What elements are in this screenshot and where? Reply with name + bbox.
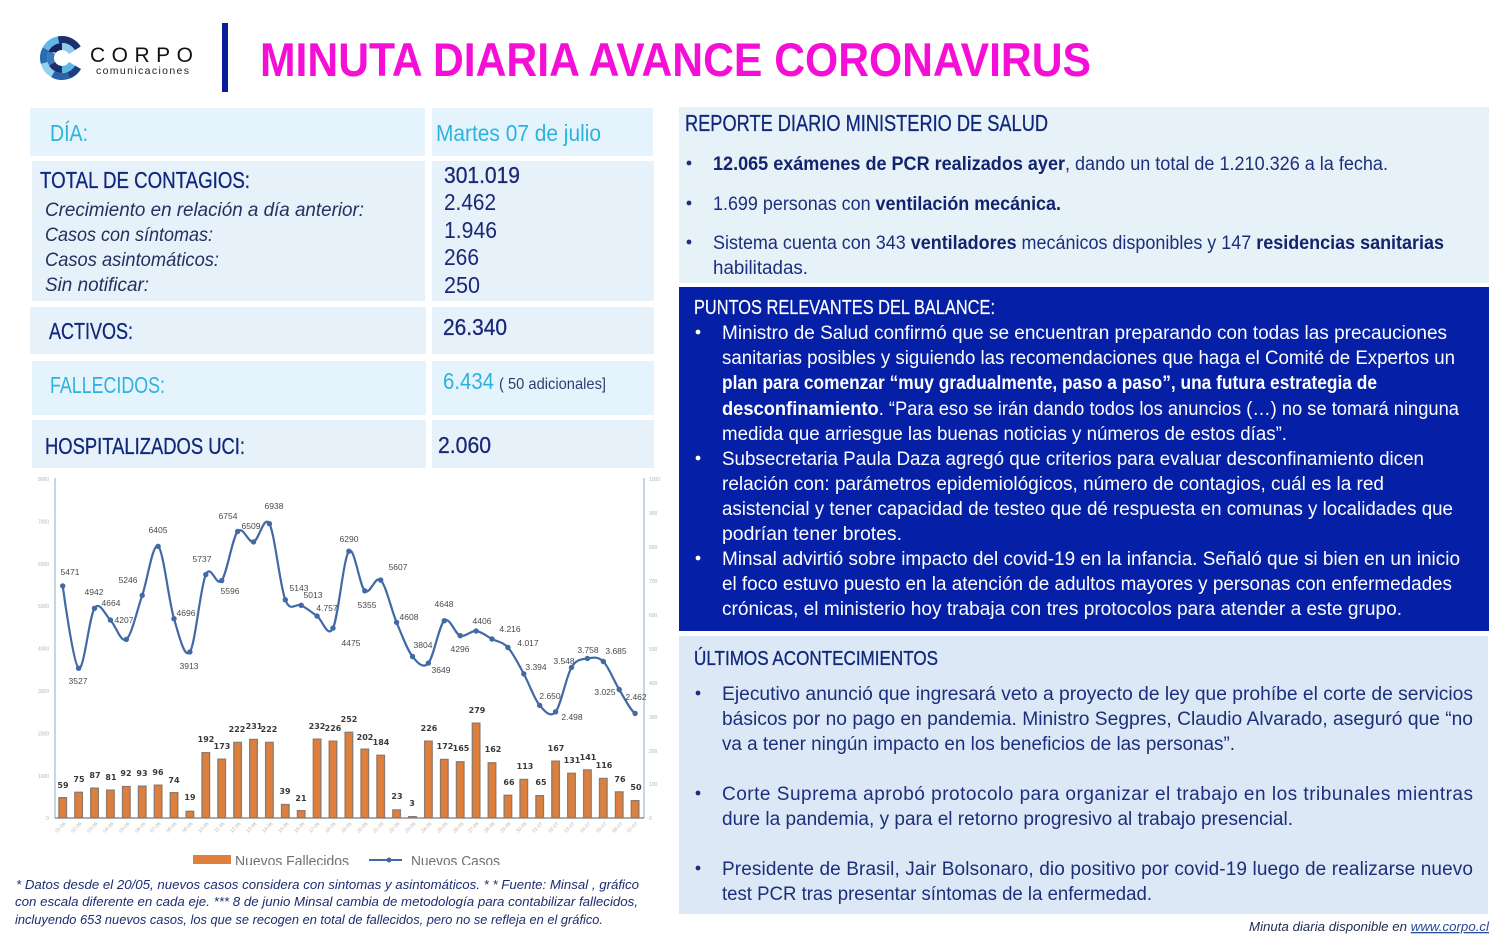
panel: dia: Martes 07 de julio [436,120,601,146]
line value labels: 4696 [177,608,196,618]
line value labels: 4648 [435,599,454,609]
bullets: balance: desconfinamiento. “Para eso se irán dando todos los anuncios (…) no se tomará ninguna [722,399,1459,420]
line value labels: 5607 [389,562,408,572]
line value labels: 5143 [290,583,309,593]
bullets: reporte [687,154,1444,279]
panel: reporte diario ministerio de salud [679,107,1489,283]
date labels: 10-06 [197,821,211,834]
bar value labels: 3 [409,799,415,808]
bar value labels: 65 [535,778,547,787]
line value labels: 5355 [358,600,377,610]
date labels: 20-06 [356,821,370,834]
bar value labels: 252 [341,715,357,724]
chart footnote [15,877,639,927]
panel: total de contagios: Casos con síntomas: [45,225,213,246]
panel: hospitalizados uci [32,420,654,468]
date labels: 15-06 [277,821,291,834]
date labels: 04-07 [579,821,593,834]
bar value labels: 162 [485,745,501,754]
bar value labels: 231 [246,722,263,731]
legend: Nuevos Fallecidos [235,853,349,870]
panel: fallecidos: ( 50 adicionales] [499,376,606,393]
bar value labels: 165 [453,744,470,753]
chart axes: 3000 [38,689,49,695]
bar value labels: 131 [564,756,581,765]
date labels: 27-06 [467,821,481,834]
chart axes: 700 [649,579,658,585]
line value labels: 3.758 [577,645,599,655]
panel: total de contagios: 1.946 [444,217,497,243]
line value labels: 4475 [342,638,361,648]
date labels: 23-06 [404,821,418,834]
date labels: 04-06 [102,821,116,834]
bars: nuevos fallecidos [59,723,639,818]
panel: hospitalizados uci: HOSPITALIZADOS UCI: [45,433,245,459]
bar value labels: 50 [630,783,642,792]
line value labels: 6938 [265,501,284,511]
panel: fallecidos: 6.434 [443,368,494,394]
chart axes [38,477,660,822]
chart axes: 400 [649,681,658,687]
icon: corpo logo [37,33,193,83]
bullets: acontecimientos: va a tener ningún impacto en los beneficios de las personas”. [722,734,1235,755]
bar value labels: 96 [152,768,164,777]
date labels: 07-06 [149,821,163,834]
chart axes: 7000 [38,520,49,526]
chart axes: 5000 [38,604,49,610]
line: nuevos casos [60,521,638,716]
chart axes: 0 [46,816,49,822]
bullets: balance: medida que arriesgue las buenas noticias y números de estos días”. [722,424,1287,445]
panel: total de contagios: Casos asintomáticos: [45,250,219,271]
chart footnote: * Datos desde el 20/05, nuevos casos considera con sintomas y asintomáticos. * * Fuente: Minsal , gráfico [16,877,639,892]
header [37,23,1091,92]
line value labels: 4207 [115,615,134,625]
bar value labels: 222 [229,725,245,734]
line value labels: 6754 [219,511,238,521]
bullets: balance: sanitarias posibles y siguiendo las recomendaciones que haga el Comité de Expertos un [722,348,1455,369]
chart axes: 300 [649,715,658,721]
date labels: 01-07 [531,821,545,834]
panel: fallecidos: FALLECIDOS: [50,372,165,398]
panel: total de contagios: Sin notificar: [45,275,149,296]
panel: total de contagios: 266 [444,244,479,270]
date labels: 03-06 [86,821,100,834]
line value labels: 2.498 [561,712,583,722]
line value labels: 3.025 [594,687,616,697]
date labels: 07-07 [626,821,640,834]
panel: activos: 26.340 [443,314,507,340]
bar value labels: 75 [73,775,85,784]
line value labels: 2.462 [625,692,647,702]
panel: activos [30,307,654,354]
panel: total de contagios: 301.019 [444,162,520,188]
date labels: 12-06 [229,821,243,834]
date labels: 11-06 [213,821,227,834]
panel: activos: ACTIVOS: [49,318,133,344]
chart: nuevos fallecidos y nuevos casos [38,477,660,873]
line value labels: 4296 [451,644,470,654]
bullets: balance: plan para comenzar “muy gradualmente, paso a paso”, una futura estrategia de [722,373,1377,394]
date labels: 25-06 [436,821,450,834]
date labels: 09-06 [181,821,195,834]
line value labels: 4.216 [499,624,521,634]
bar value labels: 21 [295,794,307,803]
bullets: acontecimientos: Corte Suprema aprobó protocolo para organizar el trabajo en los tribunales mientras [722,784,1473,805]
chart axes: 500 [649,647,658,653]
panel: dia: DÍA: [50,120,88,146]
date labels: 22-06 [388,821,402,834]
bar value labels: 279 [469,706,486,715]
date labels: 06-07 [611,821,625,834]
line value labels: 3913 [180,661,199,671]
bullets: acontecimientos: dure la pandemia, y para el retorno progresivo al trabajo presencial. [722,809,1293,830]
bar value labels: 192 [198,735,214,744]
legend: Nuevos Casos [411,853,500,870]
date labels: 02-07 [547,821,561,834]
panel: total de contagios: TOTAL DE CONTAGIOS: [40,167,250,193]
chart axes: 1000 [38,774,49,780]
date labels: 18-06 [324,821,338,834]
date labels: 01-06 [54,821,68,834]
bar value labels: 226 [325,724,342,733]
date labels [54,821,640,834]
date labels: 16-06 [293,821,307,834]
bar value labels: 141 [580,753,597,762]
line value labels: 5737 [193,554,212,564]
bar value labels: 87 [89,771,101,780]
line value labels: 3649 [432,665,451,675]
chart axes: 8000 [38,477,49,483]
bar value labels: 93 [136,769,148,778]
bar value labels: 172 [437,742,453,751]
bullets: balance [696,323,1460,620]
chart footnote: incluyendo 653 nuevos casos, los que se recogen en total de fallecidos, pero no se refleja en el gráfico. [15,912,603,927]
bullets: acontecimientos: test PCR tras presentar síntomas de la enfermedad. [722,884,1152,905]
line value labels: 4.757 [316,603,338,613]
bullets: balance: Subsecretaria Paula Daza agregó que criterios para evaluar desconfinamiento dicen [722,449,1424,470]
date labels: 08-06 [165,821,179,834]
bar value labels: 232 [309,722,325,731]
line value labels: 3804 [414,640,433,650]
footer note: Minuta diaria disponible en www.corpo.cl [1249,919,1490,934]
date labels: 26-06 [452,821,466,834]
heading: puntos relevantes: PUNTOS RELEVANTES DEL BALANCE: [694,297,995,319]
line value labels: 3527 [69,676,88,686]
line value labels: 5471 [61,567,80,577]
chart footnote: con escala diferente en cada eje. *** 8 de junio Minsal cambia de metodología para contabilizar fallecidos, [15,894,638,909]
line value labels: 4608 [400,612,419,622]
bar value labels: 39 [279,787,291,796]
bullets: acontecimientos: básicos por no pago en pandemia. Ministro Segpres, Claudio Alvarado, aseguró que “no [722,709,1473,730]
chart axes: 1000 [649,477,660,483]
line value labels: 4406 [473,616,492,626]
bar value labels [57,706,642,808]
date labels: 30-06 [515,821,529,834]
panel: total de contagios: 250 [444,272,480,298]
bar value labels: 74 [168,776,180,785]
bar value labels: 226 [421,724,438,733]
bullets: balance: crónicas, el ministerio hoy trabaja con tres protocolos para atender a este grupo. [722,599,1402,620]
date labels: 29-06 [499,821,513,834]
panel: fallecidos [32,361,654,415]
date labels: 24-06 [420,821,434,834]
chart axes: 6000 [38,562,49,568]
legend [180,853,520,873]
chart axes: 0 [649,816,652,822]
chart axes: 100 [649,782,658,788]
panel: ultimos acontecimientos [679,636,1488,914]
line value labels: 5013 [304,590,323,600]
bar value labels: 66 [503,778,515,787]
bullets: balance: asistencial y tener capacidad de testeo que dé respuesta en comunas y localidades que [722,499,1453,520]
panel: hospitalizados uci: 2.060 [438,432,491,458]
line value labels: 5596 [221,586,240,596]
bullets: reporte: 12.065 exámenes de PCR realizados ayer, dando un total de 1.210.326 a la fecha. [713,154,1388,175]
bar value labels: 113 [517,762,533,771]
line value labels: 3.685 [605,646,627,656]
divider bar [222,23,228,92]
title: MINUTA DIARIA AVANCE CORONAVIRUS [260,33,1091,86]
chart axes: 600 [649,613,658,619]
date labels: 17-06 [308,821,322,834]
line value labels: 6290 [340,534,359,544]
bullets: balance: el foco estuvo puesto en la atención de adultos mayores y personas con enfermedades [722,574,1452,595]
bullets: balance: podrían tener brotes. [722,524,902,545]
bullets: acontecimientos: Presidente de Brasil, Jair Bolsonaro, dio positivo por covid-19 luego de realizarse nuevo [722,859,1473,880]
line value labels: 4.017 [517,638,539,648]
bar value labels: 92 [120,769,132,778]
line value labels: 5246 [119,575,138,585]
date labels: 02-06 [70,821,84,834]
line value labels: 4942 [85,587,104,597]
chart axes: 800 [649,545,658,551]
bar value labels: 222 [261,725,277,734]
date labels: 13-06 [245,821,259,834]
bar value labels: 202 [357,733,373,742]
date labels: 21-06 [372,821,386,834]
bar value labels: 173 [214,742,230,751]
date labels: 05-06 [118,821,132,834]
line value labels: 3.548 [553,656,575,666]
bar value labels: 116 [596,761,613,770]
icon: corpo logo: comunicaciones [96,65,189,77]
bar value labels: 23 [391,792,403,801]
line value labels: 3.394 [525,662,547,672]
panel: total de contagios: Crecimiento en relación a día anterior: [45,200,364,221]
bullets: reporte: 1.699 personas con ventilación mecánica. [713,194,1061,215]
line value labels: 6509 [242,521,261,531]
date labels: 06-06 [134,821,148,834]
heading: ultimos acontecimientos: ÚLTIMOS ACONTECIMIENTOS [694,647,938,670]
bar value labels: 81 [105,773,117,782]
panel: total de contagios: 2.462 [444,189,496,215]
bullets: acontecimientos: Ejecutivo anunció que ingresará veto a proyecto de ley que prohíbe el corte de servicios [722,684,1473,705]
bullets: acontecimientos [696,684,1473,905]
bar value labels: 19 [184,793,196,802]
bullets: balance: Minsal advirtió sobre impacto del covid-19 en la infancia. Señaló que si bien en un inicio [722,549,1460,570]
line value labels: 6405 [149,525,168,535]
bar value labels: 76 [614,775,626,784]
chart axes: 4000 [38,646,49,652]
bullets: reporte: Sistema cuenta con 343 ventiladores mecánicos disponibles y 147 residencias sanitarias [713,233,1444,254]
bullets: balance: relación con: parámetros epidemiológicos, número de contagios, cuál es la red [722,474,1384,495]
bar value labels: 167 [548,744,564,753]
chart axes: 200 [649,749,658,755]
date labels: 28-06 [483,821,497,834]
date labels: 03-07 [563,821,577,834]
icon: corpo logo: CORPO [90,44,193,67]
bullets: balance: Ministro de Salud confirmó que se encuentran preparando con todas las precauciones [722,323,1447,344]
panel: dia [30,108,653,156]
panel: puntos relevantes del balance [679,287,1489,631]
line value labels: 4664 [102,598,121,608]
panel: total de contagios [32,161,654,301]
date labels: 05-07 [595,821,609,834]
chart axes: 2000 [38,732,49,738]
line value labels: 2.650 [539,691,561,701]
chart axes: 900 [649,511,658,517]
date labels: 19-06 [340,821,354,834]
line value labels [61,501,647,722]
bar value labels: 184 [373,738,390,747]
heading: reporte diario: REPORTE DIARIO MINISTERIO DE SALUD [685,110,1048,136]
bar value labels: 59 [57,781,69,790]
date labels: 14-06 [261,821,275,834]
bullets: reporte: habilitadas. [713,258,808,279]
